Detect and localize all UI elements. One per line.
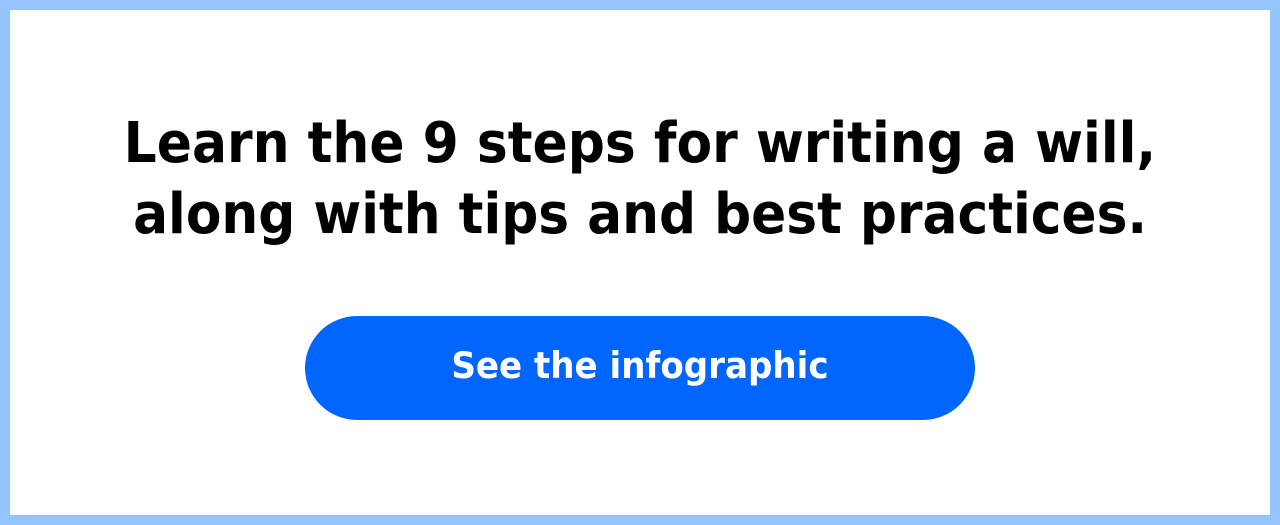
button: see the infographic — [305, 316, 975, 420]
heading line 1: Learn the 9 steps for writing a will, — [124, 111, 1156, 176]
button label: See the infographic — [451, 344, 829, 387]
heading line 2: along with tips and best practices. — [133, 182, 1147, 247]
